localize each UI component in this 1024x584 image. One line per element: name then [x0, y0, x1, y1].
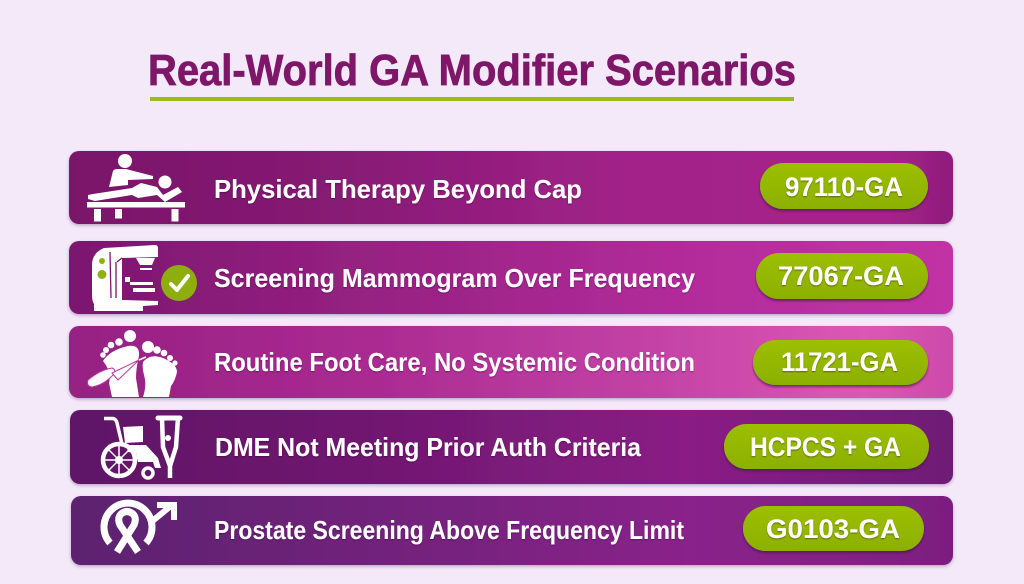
- panel: foot care: [69, 326, 953, 398]
- title: Real-World GA Modifier Scenarios: [148, 46, 796, 95]
- icon: ribbon and male symbol: [104, 503, 174, 552]
- code pill: [724, 424, 929, 469]
- code pill: [756, 253, 928, 299]
- row label: Prostate Screening Above Frequency Limit: [214, 515, 684, 545]
- icon: massage therapy: [87, 154, 185, 222]
- code pill: [760, 163, 928, 209]
- icon: green check badge: [161, 265, 197, 301]
- panel: physical therapy: [69, 151, 953, 224]
- panel: DME: [70, 410, 953, 484]
- row label: Routine Foot Care, No Systemic Condition: [214, 347, 695, 377]
- row label: Physical Therapy Beyond Cap: [214, 174, 582, 204]
- icon: wheelchair and crutch: [103, 418, 180, 478]
- row label: Screening Mammogram Over Frequency: [214, 263, 696, 293]
- code pill: 11721-GA: [781, 347, 898, 377]
- icon: feet and nippers: [88, 330, 178, 397]
- panel: mammogram: [69, 241, 953, 314]
- code pill: [753, 340, 928, 385]
- code pill: 97110-GA: [785, 172, 903, 202]
- title underline: [150, 97, 794, 101]
- code pill: 77067-GA: [778, 261, 904, 291]
- panel: prostate screening: [71, 496, 953, 565]
- code pill: [743, 506, 924, 551]
- icon: mammography machine: [92, 245, 158, 311]
- row label: DME Not Meeting Prior Auth Criteria: [215, 432, 642, 462]
- code pill: HCPCS + GA: [750, 432, 901, 462]
- code pill: G0103-GA: [766, 514, 900, 544]
